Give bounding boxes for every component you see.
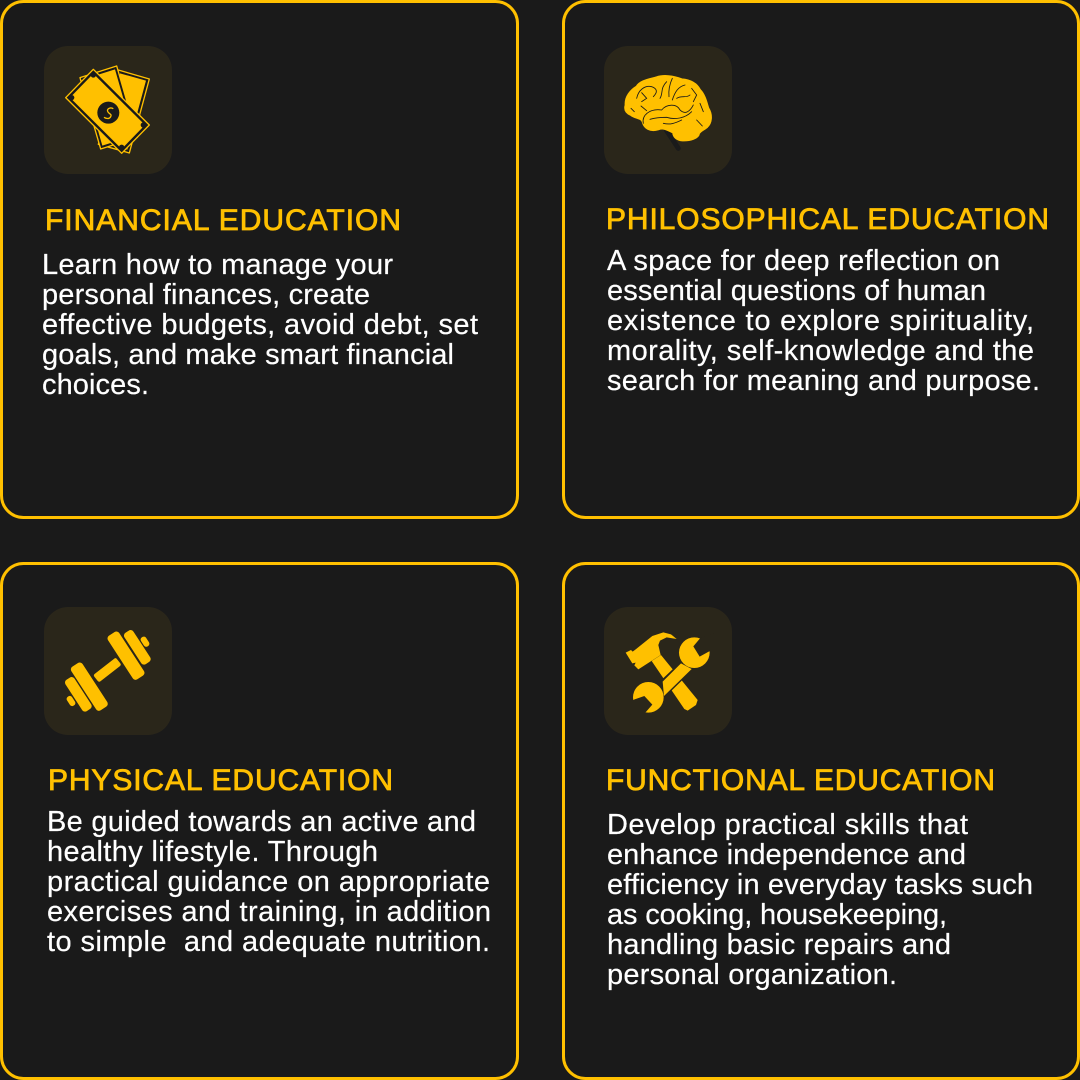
- heading: physical education: PHYSICAL EDUCATION: [48, 764, 393, 797]
- text block: functional description: personal organization.: [607, 959, 897, 991]
- text block: financial description: effective budgets, avoid debt, set: [42, 309, 478, 341]
- icon: dumbbell: [44, 607, 172, 735]
- text block: physical description: Be guided towards an active and: [47, 806, 476, 838]
- text block: financial description: personal finances, create: [42, 279, 370, 311]
- icon: hammer and wrench: [604, 607, 732, 735]
- text block: financial description: Learn how to manage your: [42, 249, 393, 281]
- heading: philosophical education: PHILOSOPHICAL EDUCATION: [606, 203, 1049, 236]
- text block: philosophical description: essential questions of human: [607, 275, 986, 307]
- heading: functional education: FUNCTIONAL EDUCATION: [606, 764, 995, 797]
- icon: banknotes: [44, 46, 172, 174]
- text block: functional description: Develop practical skills that: [607, 809, 968, 841]
- text block: philosophical description: morality, self-knowledge and the: [607, 335, 1034, 367]
- text block: physical description: exercises and training, in addition: [47, 896, 491, 928]
- icon: brain: [604, 46, 732, 174]
- panel: physical education: [2, 564, 518, 1078]
- heading: financial education: FINANCIAL EDUCATION: [45, 204, 401, 237]
- text block: functional description: efficiency in everyday tasks such: [607, 869, 1033, 901]
- text block: financial description: goals, and make smart financial: [42, 339, 454, 371]
- panel: financial education: [2, 2, 518, 518]
- text block: functional description: handling basic repairs and: [607, 929, 951, 961]
- text block: philosophical description: [607, 245, 1040, 397]
- panel: philosophical education: [564, 2, 1078, 518]
- text block: physical description: practical guidance on appropriate: [47, 866, 490, 898]
- text block: financial description: choices.: [42, 369, 149, 401]
- text block: functional description: [607, 809, 1033, 991]
- text block: philosophical description: search for meaning and purpose.: [607, 365, 1040, 397]
- text block: philosophical description: A space for deep reflection on: [607, 245, 1000, 277]
- text block: functional description: enhance independence and: [607, 839, 966, 871]
- text block: physical description: to simple and adequate nutrition.: [47, 926, 490, 958]
- panel: functional education: [564, 564, 1078, 1078]
- text block: functional description: as cooking, housekeeping,: [607, 899, 947, 931]
- text block: physical description: healthy lifestyle. Through: [47, 836, 378, 868]
- text block: physical description: [47, 806, 491, 958]
- text block: financial description: [42, 249, 478, 401]
- text block: philosophical description: existence to explore spirituality,: [607, 305, 1034, 337]
